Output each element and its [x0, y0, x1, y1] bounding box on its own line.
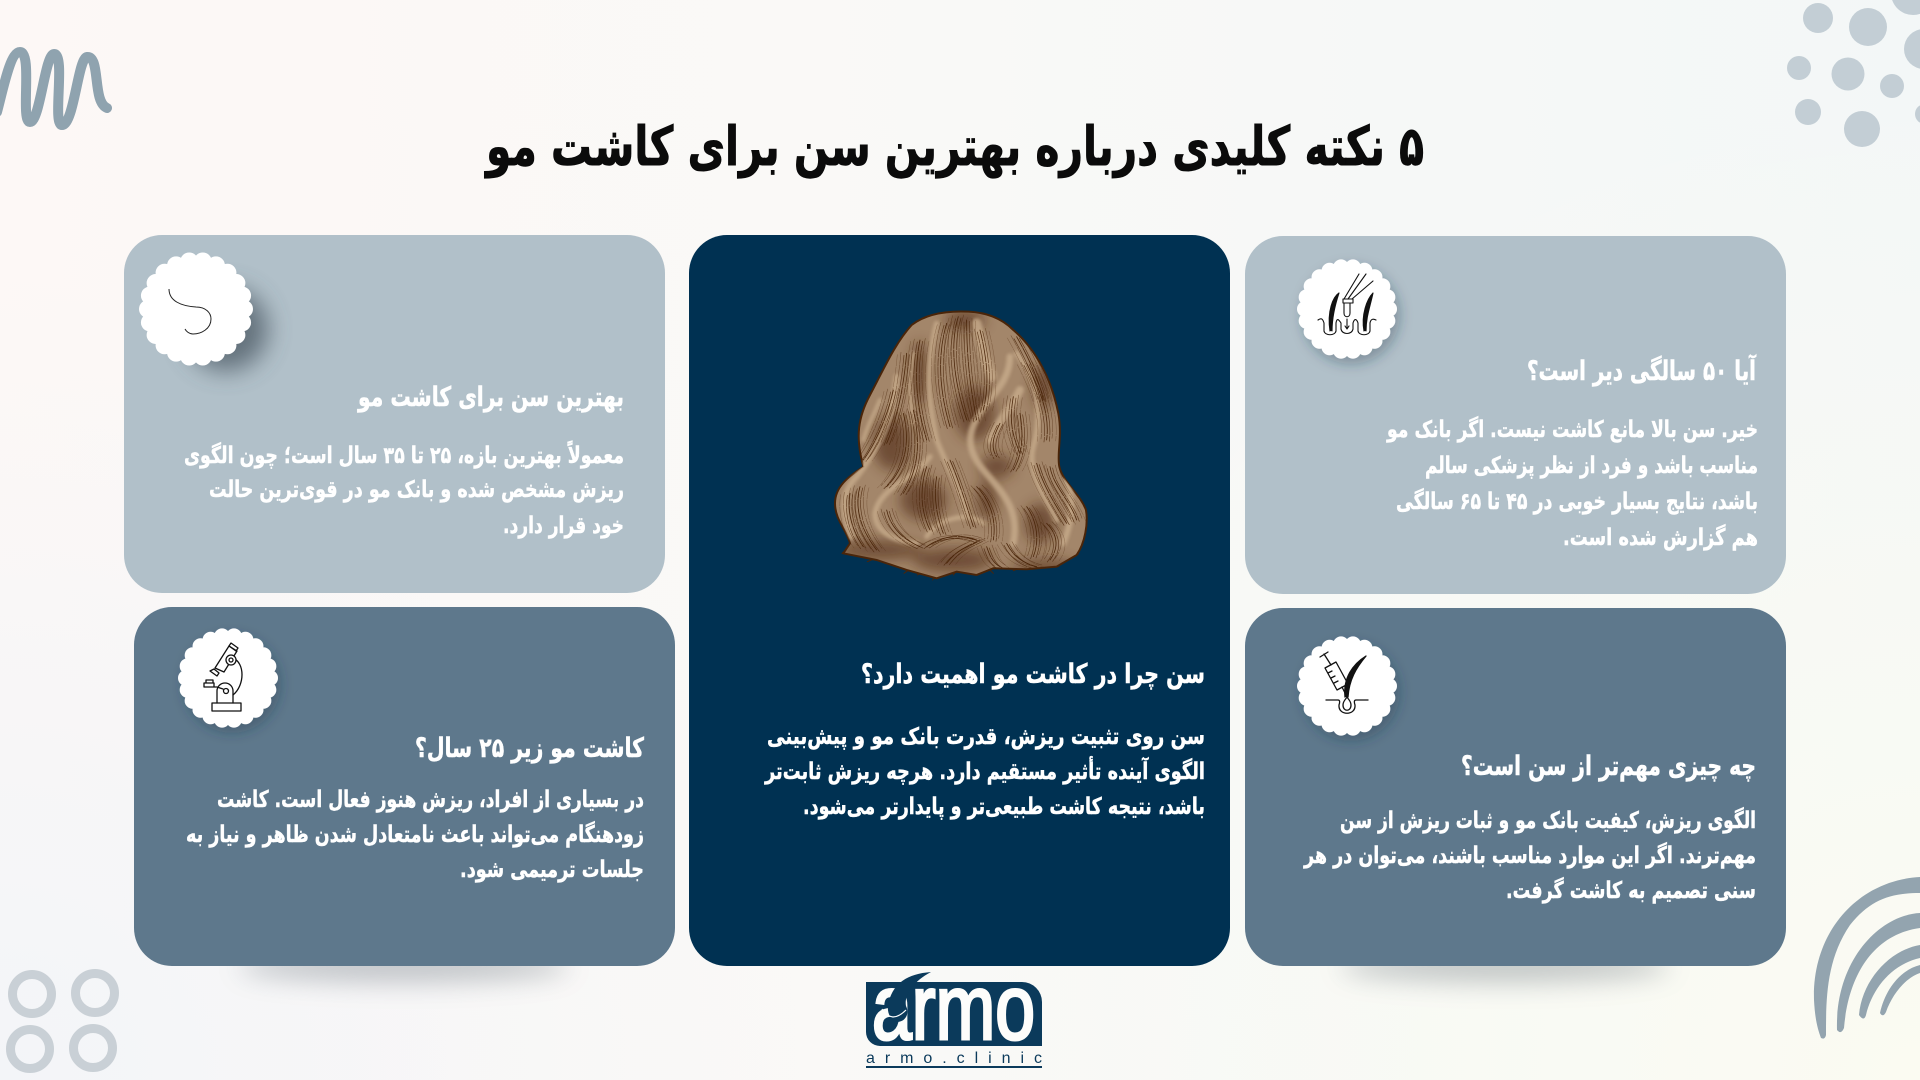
- panel: is fifty too late: [1245, 236, 1786, 594]
- icon: hair follicles with applicator: [1303, 265, 1391, 353]
- body text: در بسیاری از افراد، ریزش هنوز فعال است. کاشت: [217, 787, 644, 813]
- heading: سن چرا در کاشت مو اهمیت دارد؟: [861, 659, 1205, 690]
- body text: باشد، نتایج بسیار خوبی در ۴۵ تا ۶۵ سالگی: [1396, 488, 1758, 515]
- icon: single hair strand: [147, 260, 245, 358]
- panel: transplant under 25: [134, 607, 675, 966]
- body text: [1303, 807, 1756, 904]
- panel: why age matters (center): [689, 235, 1230, 966]
- body text: مناسب باشد و فرد از نظر پزشکی سالم: [1425, 453, 1758, 479]
- heading: بهترین سن برای کاشت مو: [356, 382, 624, 413]
- logo: armo clinic: armo: [872, 957, 1035, 1059]
- heading: چه چیزی مهم‌تر از سن است؟: [1461, 751, 1756, 782]
- heading: کاشت مو زیر ۲۵ سال؟: [415, 733, 644, 764]
- body text: الگوی ریزش، کیفیت بانک مو و ثبات ریزش از سن: [1340, 807, 1756, 834]
- panel: best age for hair transplant: [124, 235, 665, 593]
- heading: آیا ۵۰ سالگی دیر است؟: [1527, 354, 1757, 387]
- title: ۵ نکته کلیدی درباره بهترین سن برای کاشت مو: [484, 115, 1424, 178]
- body text: سنی تصمیم به کاشت گرفت.: [1506, 877, 1756, 904]
- icon shadow: hair strand badge: [184, 287, 268, 371]
- shadow under lower left card: [239, 950, 569, 982]
- body text: [1386, 416, 1758, 551]
- body text: مهم‌ترند. اگر این موارد مناسب باشند، می‌توان در هر: [1303, 842, 1756, 869]
- logo: armo clinic: armo.clinic: [866, 1050, 1042, 1067]
- body text: ریزش مشخص شده و بانک مو در قوی‌ترین حالت: [209, 477, 624, 503]
- shadow under lower right card: [1340, 950, 1670, 982]
- illustration: wavy brown hair: [835, 310, 1087, 580]
- decoration: squiggle top left: [0, 52, 107, 125]
- decoration: rings bottom left: [10, 974, 114, 1068]
- body text: [186, 787, 644, 883]
- body text: [184, 441, 624, 539]
- panel: what matters more than age: [1245, 608, 1786, 966]
- decoration: dots top right: [1787, 0, 1920, 147]
- body text: سن روی تثبیت ریزش، قدرت بانک مو و پیش‌بینی: [767, 724, 1205, 750]
- body text: خیر. سن بالا مانع کاشت نیست. اگر بانک مو: [1386, 416, 1758, 443]
- body text: جلسات ترمیمی شود.: [460, 857, 644, 883]
- decoration: arcs bottom right: [1814, 877, 1920, 1039]
- body text: الگوی آینده تأثیر مستقیم دارد. هرچه ریزش ثابت‌تر: [764, 755, 1205, 785]
- body text: خود قرار دارد.: [503, 513, 624, 539]
- body text: هم گزارش شده است.: [1563, 524, 1758, 551]
- body text: [764, 724, 1205, 820]
- body text: زودهنگام می‌تواند باعث نامتعادل شدن ظاهر و نیاز به: [186, 821, 644, 848]
- icon: syringe and follicle: [1303, 642, 1391, 730]
- body text: باشد، نتیجه کاشت طبیعی‌تر و پایدارتر می‌شود.: [803, 794, 1205, 820]
- icon: microscope: [184, 634, 272, 722]
- body text: معمولاً بهترین بازه، ۲۵ تا ۳۵ سال است؛ چون الگوی: [184, 441, 624, 469]
